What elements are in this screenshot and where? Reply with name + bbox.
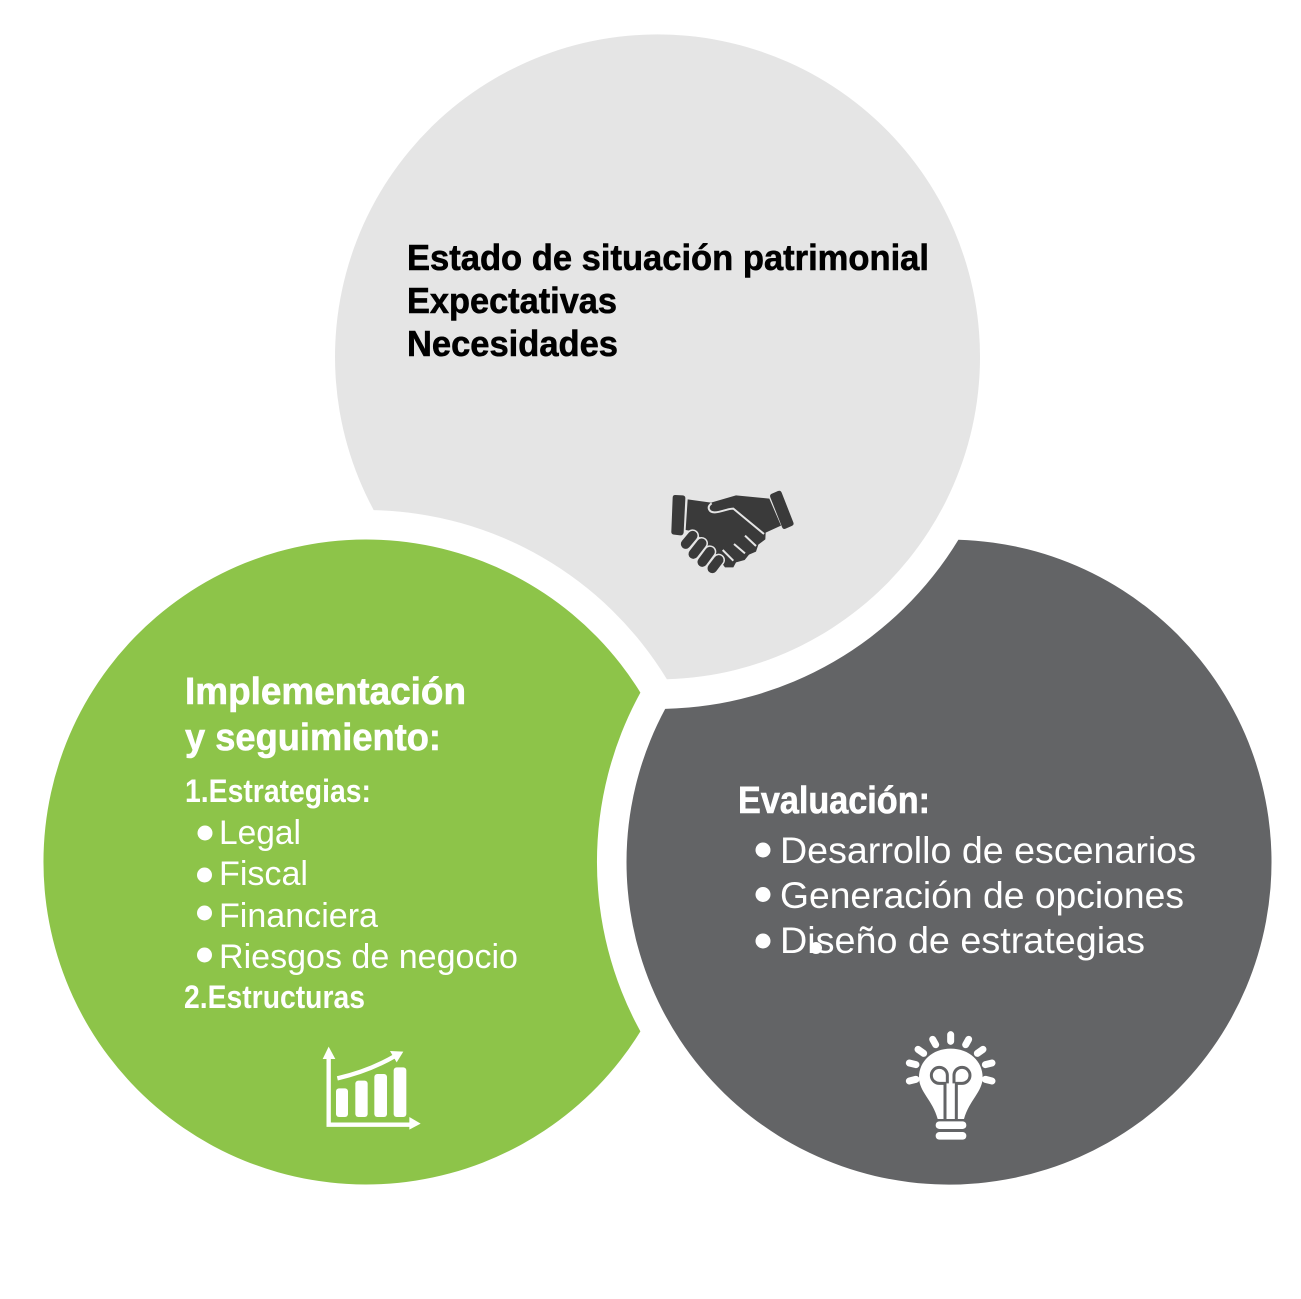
dark circle shape — [627, 540, 1272, 1185]
panel: left green circle — [43, 540, 640, 1184]
icon: light bulb — [909, 1035, 992, 1140]
text block: strategies list: Financiera — [219, 897, 378, 935]
text block: evaluation list — [756, 830, 1196, 961]
text block: diagnosis items: Estado de situación patrimonial — [407, 237, 929, 278]
text block: strategies list: 1.Estrategias: — [185, 773, 371, 809]
text block: diagnosis items: Necesidades — [407, 323, 618, 364]
text block: strategies list: 2.Estructuras — [184, 979, 365, 1015]
grey circle shape — [335, 34, 980, 679]
green circle shape — [43, 540, 640, 1184]
text block: strategies list — [184, 773, 518, 1015]
text block: strategies list: Legal — [219, 814, 301, 852]
icon: growth bar chart — [323, 1047, 421, 1130]
text block: diagnosis items: Expectativas — [407, 280, 617, 321]
text block: strategies list: Riesgos de negocio — [219, 938, 518, 976]
heading: implementation: y seguimiento: — [185, 717, 441, 759]
heading: evaluation: Evaluación: — [738, 780, 930, 822]
panel: top grey circle — [335, 34, 980, 679]
text block: evaluation list: Generación de opciones — [780, 875, 1184, 916]
heading: implementation: Implementación — [185, 671, 466, 713]
icon: handshake — [671, 491, 794, 568]
text block: evaluation list: Desarrollo de escenarios — [780, 830, 1196, 871]
text block: evaluation list: Diseño de estrategias — [780, 920, 1145, 961]
heading: implementation — [185, 671, 466, 759]
panel: right dark circle — [627, 540, 1272, 1185]
text block: diagnosis items — [407, 237, 929, 364]
text block: strategies list: Fiscal — [219, 855, 308, 893]
